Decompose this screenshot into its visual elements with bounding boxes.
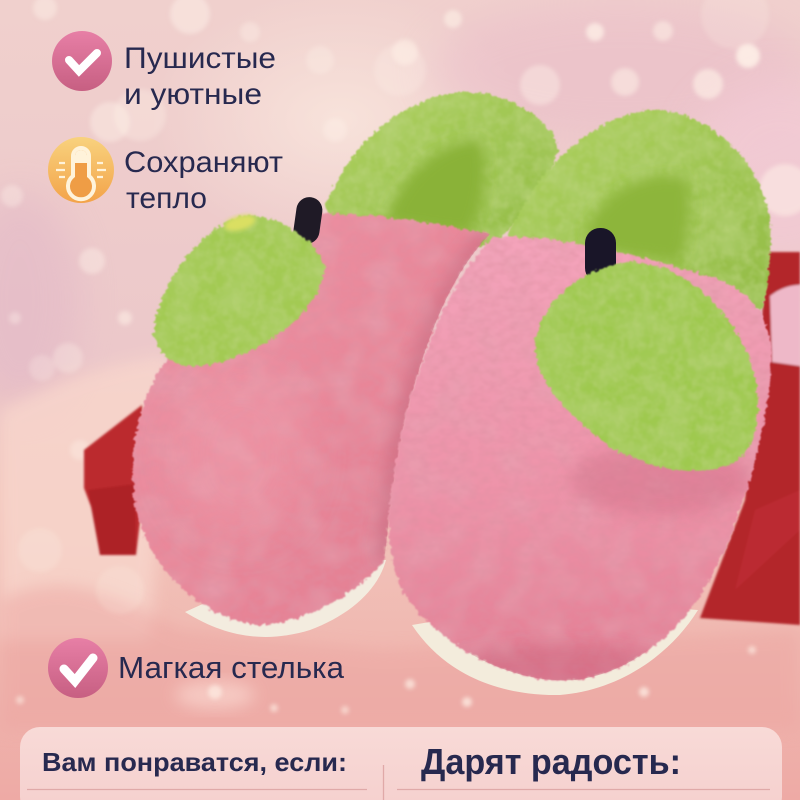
left slipper xyxy=(132,92,558,637)
feature: soft insole xyxy=(48,638,345,698)
icon: check mark xyxy=(48,638,108,698)
label: keep warm: тепло xyxy=(126,182,207,215)
left slipper: green heel lining xyxy=(325,92,558,250)
left slipper: green leaf xyxy=(153,216,325,366)
right slipper: green leaf xyxy=(535,262,758,471)
heading: bring joy: Дарят радость: xyxy=(421,741,681,782)
red gift box, left xyxy=(84,405,146,555)
left slipper: leaf highlight xyxy=(223,212,257,234)
label: fluffy and cozy xyxy=(124,42,276,111)
bottom panel xyxy=(20,727,782,800)
label: keep warm xyxy=(124,146,283,215)
left slipper: inner hollow xyxy=(386,140,485,235)
left slipper: seam shadow xyxy=(238,231,490,568)
right slipper: white sole xyxy=(412,600,698,695)
right slipper: green heel lining xyxy=(508,110,771,310)
left slipper: pink fur body xyxy=(132,213,490,625)
feature: fluffy and cozy xyxy=(52,31,276,111)
left slipper: white sole xyxy=(185,560,386,637)
heading: you will like them if: Вам понраватся, если: xyxy=(42,747,347,777)
right slipper: lower shading xyxy=(410,445,750,735)
right slipper xyxy=(389,110,771,735)
right slipper: pink fur body xyxy=(389,237,771,680)
red gift box, right xyxy=(700,252,800,625)
right slipper: inner hollow xyxy=(586,177,689,262)
label: soft insole: Магкая стелька xyxy=(118,650,345,685)
left slipper: stem xyxy=(292,195,324,246)
label: fluffy and cozy: Пушистые xyxy=(124,42,276,75)
feature: keep warm xyxy=(48,137,283,215)
icon: thermometer xyxy=(48,137,114,203)
right slipper: stem xyxy=(585,228,616,283)
label: keep warm: Сохраняют xyxy=(124,146,283,179)
label: fluffy and cozy: и уютные xyxy=(124,78,262,111)
icon: check mark xyxy=(52,31,112,91)
